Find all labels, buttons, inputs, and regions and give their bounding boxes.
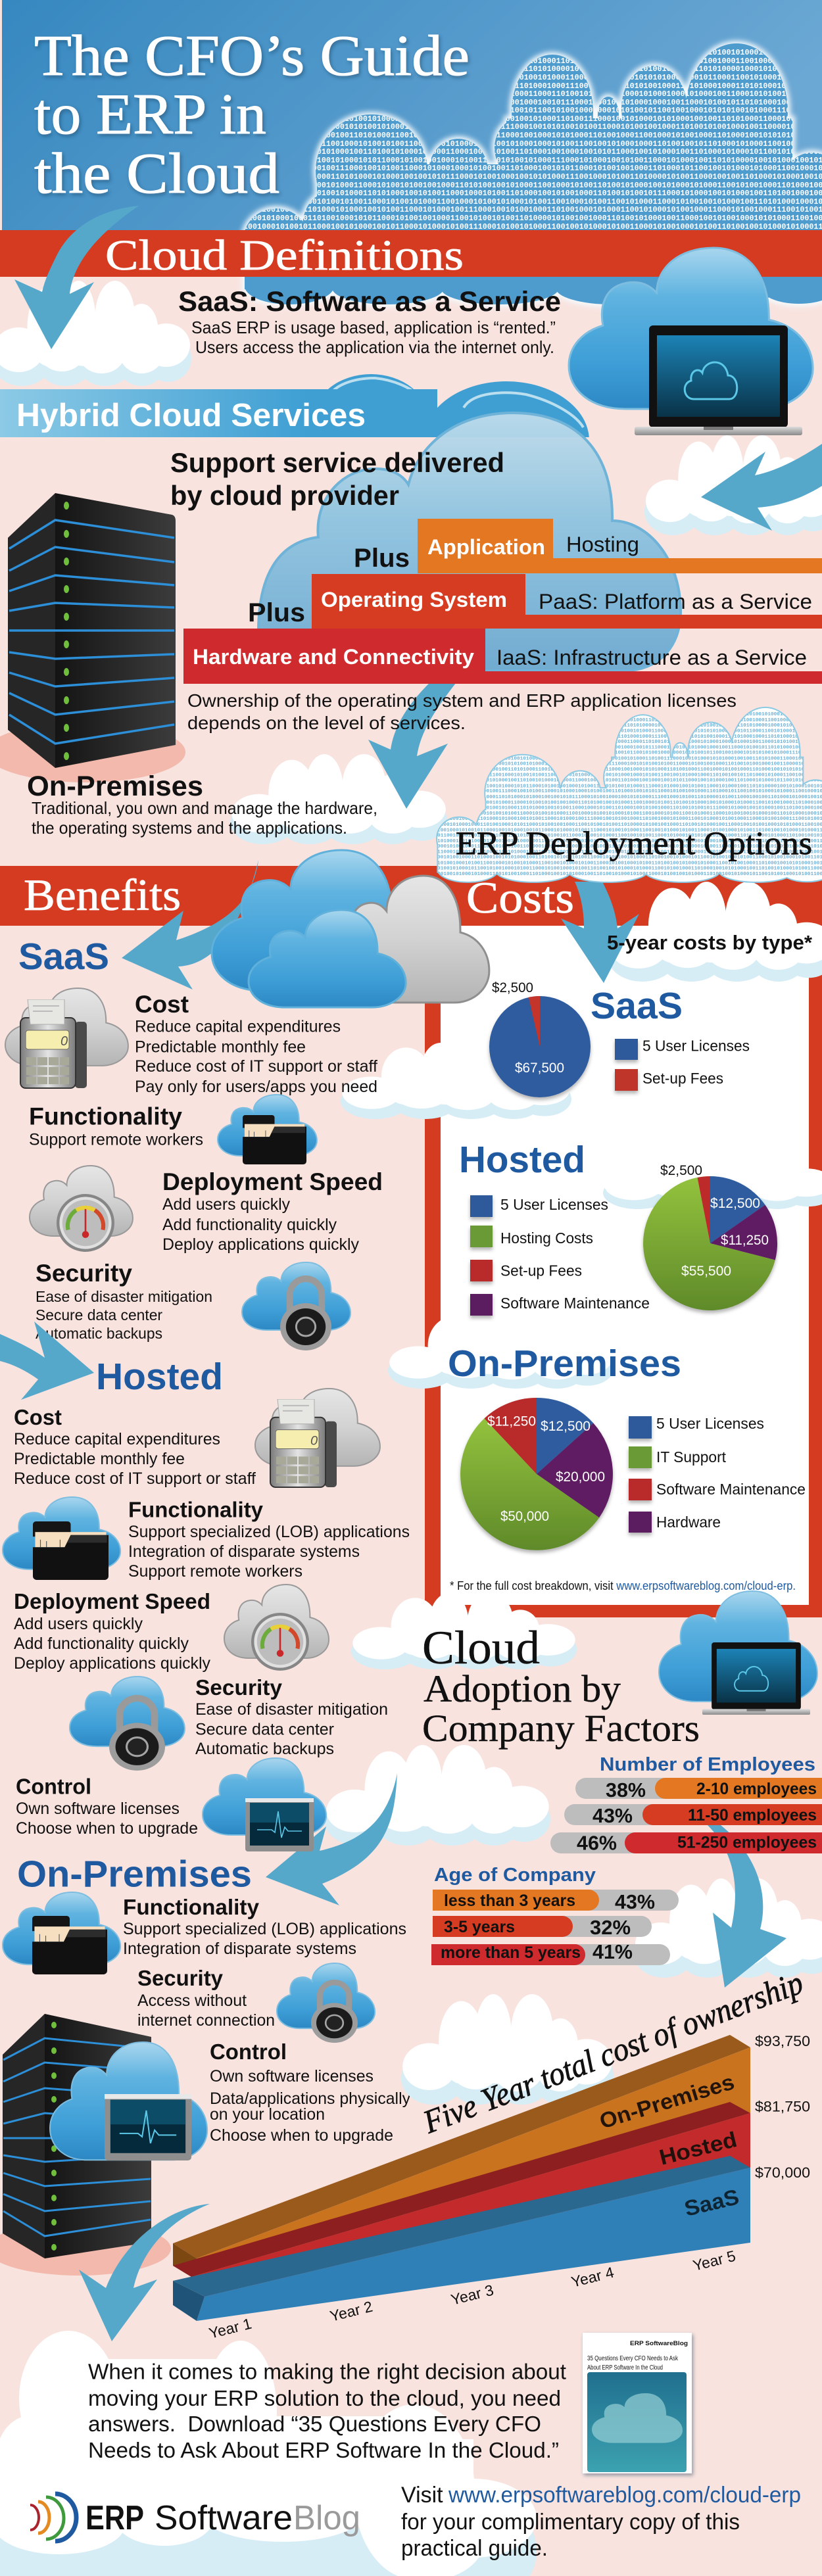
icon: server stack: [8, 493, 176, 768]
heading: Costs: Costs: [466, 872, 574, 922]
text: cost: Pay only for users/apps you need: [135, 1078, 377, 1096]
bar: 11-50 employees: 11-50 employees: [688, 1806, 817, 1825]
icon: gauge in cloud: [30, 1166, 133, 1252]
bar: application: Hosting: [566, 533, 639, 556]
icon: laptop in cloud: [659, 1591, 817, 1715]
icon: lower server stack: [3, 2014, 151, 2258]
white cloud behind chart title: [401, 1994, 614, 2105]
bar: operating system: [248, 574, 822, 629]
bar: 51-250 employees: 51-250 employees: [677, 1834, 817, 1852]
panel: Hosted costs: [459, 1139, 777, 1316]
value labels: $93,750: [755, 2033, 810, 2049]
chart: number of employees: Number of Employees: [600, 1754, 815, 1775]
text: functionality: Functionality: [29, 1103, 182, 1130]
arrow to On-Premises: [266, 1773, 397, 1905]
text: deployment speed: Deployment Speed: [162, 1168, 383, 1195]
legend: 5 User Licenses: [642, 1038, 750, 1055]
heading: Benefits: Benefits: [24, 870, 181, 920]
text: deployment speed: Deploy applications quickly: [14, 1654, 210, 1673]
arrow from right: [701, 444, 822, 531]
call to action text: Needs to Ask About ERP Software In the Cloud.”: [88, 2438, 559, 2462]
bar: 51-250 employees: [550, 1832, 822, 1854]
bar: hardware and connectivity: [183, 629, 822, 684]
text: On-Premises definition: the operating systems and the applications.: [32, 818, 347, 838]
heading: Cloud Definitions: Cloud Definitions: [105, 231, 464, 279]
ownership text: [187, 690, 737, 733]
text: control: on your location: [210, 2105, 325, 2124]
panel: On-Premises costs: $11,250: [487, 1414, 536, 1429]
booklet cover: 35 Questions Every CFO Needs to Ask: [587, 2355, 679, 2362]
pie chart: On-Premises: [460, 1398, 613, 1550]
text: deployment speed: Add functionality quickly: [162, 1216, 337, 1234]
text: security: Automatic backups: [195, 1740, 334, 1758]
arrow to Hosted: [0, 1322, 94, 1400]
white cloud left of on-premises heading: [388, 1312, 614, 1389]
laptop in blue cloud: [569, 248, 813, 435]
text: functionality: [128, 1497, 410, 1581]
bar: 2-10 employees: [575, 1778, 822, 1801]
text: deployment speed: Add functionality quickly: [14, 1634, 189, 1653]
call to action text: When it comes to making the right decision about: [88, 2359, 566, 2384]
text: deployment speed: Deploy applications quickly: [162, 1235, 359, 1254]
text: control: Control: [16, 1774, 91, 1799]
bar: application: Plus: [354, 544, 410, 573]
band: benefits and costs: [0, 866, 822, 926]
panel: On-Premises costs: [448, 1343, 806, 1592]
white cloud bottom of costs panel: [351, 1593, 577, 1669]
legend: 5 User Licenses: [500, 1196, 608, 1213]
text: functionality: [123, 1895, 406, 1958]
bar: 3-5 years: 3-5 years: [444, 1918, 515, 1936]
icon: cash register in cloud: [255, 1389, 380, 1487]
pie chart: Hosted: [643, 1176, 777, 1310]
big pale cloud behind hybrid stack: [258, 413, 681, 671]
legend: Software Maintenance: [656, 1481, 806, 1498]
white cloud behind arrow: [325, 1745, 550, 1846]
call to action text: [88, 2359, 566, 2462]
bar: more than 5 years: more than 5 years: [441, 1944, 581, 1962]
text: SaaS definition: SaaS: Software as a Service: [178, 286, 561, 318]
text: cost: Predictable monthly fee: [14, 1450, 185, 1468]
icon: cash register in cloud: [5, 988, 128, 1088]
text: security: [137, 1966, 275, 2030]
panel: Hosted costs: $55,500: [681, 1264, 731, 1279]
text: SaaS definition: Users access the application via the internet only.: [195, 337, 554, 357]
bar: more than 5 years: 41%: [592, 1940, 633, 1963]
icon: lock in cloud: [277, 1963, 375, 2043]
text: control: Control: [210, 2039, 287, 2064]
ribbon: Hosted: [173, 2102, 750, 2297]
text: On-Premises definition: [27, 771, 377, 838]
panel: On-Premises costs: $20,000: [556, 1469, 605, 1485]
bar: 51-250 employees: 46%: [577, 1832, 617, 1854]
title: [34, 24, 470, 206]
heading: Cloud Adoption by Company Factors: Adoption by: [423, 1667, 621, 1710]
text: security: Secure data center: [195, 1721, 334, 1739]
bar: 3-5 years: [433, 1916, 652, 1939]
bar: 2-10 employees: 38%: [606, 1778, 646, 1801]
visit text: for your complimentary copy of this: [401, 2510, 740, 2535]
legend: 5 User Licenses: [656, 1415, 764, 1432]
logo: ERP SoftwareBlog: ERP: [85, 2499, 144, 2537]
section: Hosted benefits: [3, 1356, 410, 1838]
text: security: Secure data center: [36, 1306, 162, 1324]
text: deployment speed: [162, 1168, 383, 1254]
panel: Hosted costs: $12,500: [710, 1196, 760, 1211]
booklet cover: About ERP Software In the Cloud: [587, 2364, 663, 2372]
heading: Cloud Adoption by Company Factors: Company Factors: [422, 1707, 700, 1750]
bar: operating system: PaaS: Platform as a Service: [539, 590, 812, 613]
bar: operating system: Operating System: [321, 588, 507, 611]
legend: Hosting Costs: [500, 1229, 593, 1247]
text: control: Own software licenses: [210, 2067, 374, 2086]
value labels: $70,000: [755, 2164, 810, 2181]
ribbon: On-Premises: [173, 2035, 750, 2277]
white cloud behind right arrow: [634, 1878, 822, 1978]
white cloud right of costs: [608, 882, 822, 982]
visit text: www.erpsoftwareblog.com/cloud-erp: [448, 2483, 801, 2508]
text: security: Security: [195, 1675, 283, 1700]
icon: monitor in cloud: [50, 2042, 207, 2160]
text: cost: Predictable monthly fee: [135, 1038, 306, 1057]
hybrid cloud services bar: [0, 389, 437, 437]
text: cost: [135, 991, 377, 1096]
logo rings: [30, 2494, 76, 2541]
title: The CFO’s Guide: [34, 24, 470, 88]
text: functionality: Functionality: [128, 1497, 264, 1521]
logo: ERP SoftwareBlog: Blog: [293, 2499, 360, 2537]
logo: ERP SoftwareBlog: [30, 2494, 360, 2541]
text: security: internet connection: [137, 2011, 275, 2030]
panel: On-Premises costs: On-Premises: [448, 1343, 681, 1385]
label: 5-year costs by type: 5-year costs by type*: [607, 931, 813, 954]
visit text: Visit: [401, 2483, 443, 2508]
panel: Hosted costs: $11,250: [721, 1233, 769, 1248]
bar: hardware and connectivity: IaaS: Infrastructure as a Service: [496, 646, 807, 669]
text: functionality: Support specialized (LOB) applications: [123, 1920, 406, 1938]
icon: lock in cloud: [242, 1262, 351, 1350]
text: security: Security: [36, 1260, 132, 1287]
panel: SaaS costs: $67,500: [515, 1061, 564, 1076]
ownership text: Ownership of the operating system and ERP application licenses: [187, 690, 737, 711]
year labels: Year 1: [207, 2315, 253, 2342]
section: SaaS benefits: [5, 936, 383, 1350]
text: deployment speed: Add users quickly: [14, 1615, 143, 1633]
ERP deployment options cloud: [437, 708, 822, 882]
text: security: Security: [137, 1966, 224, 1990]
white cloud over frame: [341, 1043, 571, 1119]
footnote: * For the full cost breakdown, visit www.erpsoftwareblog.com/cloud-erp.: [450, 1579, 796, 1592]
heading: Hybrid Cloud Services: Hybrid Cloud Services: [16, 398, 366, 433]
heading band: Cloud Definitions: [0, 230, 822, 277]
shadow under server stack: [0, 722, 185, 782]
legend: Software Maintenance: [500, 1295, 650, 1312]
panel: SaaS costs: $2,500: [492, 980, 533, 995]
text: cost: Reduce cost of IT support or staff: [14, 1469, 256, 1488]
text: deployment speed: Deployment Speed: [14, 1589, 210, 1613]
bar: less than 3 years: 43%: [615, 1890, 655, 1913]
legend: Hardware: [656, 1514, 721, 1531]
pie chart: SaaS: [489, 996, 591, 1097]
text: control: Own software licenses: [16, 1800, 180, 1818]
title: the Cloud: [34, 142, 279, 206]
arrow down from title: [14, 206, 139, 349]
bar: application: Application: [427, 535, 545, 559]
arrow down to costs: [561, 882, 639, 983]
text: control: Choose when to upgrade: [16, 1819, 198, 1838]
ribbon: SaaS: SaaS: [682, 2184, 741, 2221]
ownership text: depends on the level of services.: [187, 713, 466, 733]
icon: folder in cloud: [218, 1095, 317, 1164]
year labels: Year 4: [569, 2264, 616, 2291]
bar: less than 3 years: [433, 1890, 679, 1913]
costs panel frame: [425, 926, 822, 1617]
text: cost: Reduce cost of IT support or staff: [135, 1057, 377, 1076]
call to action text: answers. Download “35 Questions Every CFO: [88, 2412, 541, 2436]
white cloud under arrow: [230, 754, 447, 844]
text: control: [16, 1774, 198, 1838]
arrow down to on-premises: [368, 677, 460, 809]
text: security: [36, 1260, 212, 1342]
icon: gauge in cloud: [224, 1585, 329, 1671]
white cloud upper right: [644, 435, 822, 535]
text: cost: Cost: [14, 1405, 62, 1429]
binary cloud illustration: [243, 43, 822, 304]
ribbon: SaaS: [173, 2156, 750, 2321]
year labels: Year 5: [691, 2247, 737, 2274]
white cloud left: [0, 281, 191, 386]
white cloud behind hosted pie: [603, 1141, 822, 1209]
section: Hosted benefits: Hosted: [96, 1356, 223, 1398]
legend: [629, 1415, 806, 1533]
value labels: $81,750: [755, 2099, 810, 2115]
icon: folder in cloud: [3, 1892, 120, 1974]
footer cloud: [0, 2331, 537, 2576]
header sky background: [2, 0, 822, 231]
text: functionality: Functionality: [123, 1895, 260, 1919]
arrow down to footer: [79, 2204, 210, 2341]
heading: ERP Deployment Options: ERP Deployment Options: [456, 824, 812, 861]
title: to ERP in: [34, 83, 266, 147]
panel: Hosted costs: Hosted: [459, 1139, 585, 1181]
legend: Set-up Fees: [642, 1070, 723, 1087]
value labels: [755, 2033, 810, 2181]
text: functionality: Integration of disparate systems: [123, 1940, 356, 1958]
cloud cluster: [212, 850, 489, 1007]
legend: IT Support: [656, 1448, 727, 1466]
chart: five year total cost of ownership: [173, 1964, 810, 2342]
text: control: [210, 2039, 410, 2145]
text: functionality: Support remote workers: [29, 1131, 203, 1149]
bar: 11-50 employees: 43%: [592, 1804, 633, 1827]
icon: folder in cloud: [3, 1497, 120, 1580]
legend: Set-up Fees: [500, 1262, 582, 1279]
arrow to SaaS benefits: [122, 860, 258, 990]
panel: Hosted costs: $2,500: [660, 1163, 702, 1178]
text: security: Ease of disaster mitigation: [36, 1288, 212, 1305]
year labels: [207, 2247, 737, 2342]
text: security: [195, 1675, 388, 1758]
cloud lobes above hybrid bar: [328, 374, 589, 437]
bar: 2-10 employees: 2-10 employees: [696, 1780, 817, 1798]
chart: number of employees: [550, 1754, 822, 1854]
panel: SaaS costs: [489, 980, 750, 1097]
text: cost: Reduce capital expenditures: [14, 1430, 220, 1448]
text: security: Ease of disaster mitigation: [195, 1700, 388, 1719]
text: security: Automatic backups: [36, 1325, 162, 1342]
support text: [170, 447, 504, 511]
booklet cover: ERP SoftwareBlog: [630, 2340, 688, 2347]
text: On-Premises definition: Traditional, you own and manage the hardware,: [32, 798, 377, 818]
icon: lock in cloud: [70, 1677, 185, 1771]
bar: application: [354, 519, 822, 573]
text: On-Premises definition: On-Premises: [27, 771, 203, 802]
bar: hardware and connectivity: Hardware and Connectivity: [193, 645, 474, 669]
call to action text: moving your ERP solution to the cloud, you need: [88, 2386, 561, 2410]
text: functionality: [29, 1103, 203, 1149]
text: functionality: Support specialized (LOB) applications: [128, 1523, 410, 1541]
icon: monitor in cloud: [203, 1758, 326, 1851]
section: SaaS benefits: SaaS: [18, 936, 109, 978]
year labels: Year 3: [449, 2281, 495, 2308]
text: SaaS definition: [178, 286, 561, 357]
booklet cover: [583, 2333, 692, 2473]
text: deployment speed: [14, 1589, 210, 1673]
bar: 11-50 employees: [564, 1804, 822, 1827]
text: deployment speed: Add users quickly: [162, 1195, 290, 1214]
heading: Cloud Adoption by Company Factors: [422, 1621, 700, 1750]
heading: Cloud Adoption by Company Factors: Cloud: [422, 1621, 540, 1674]
legend: [470, 1195, 650, 1316]
text: cost: [14, 1405, 256, 1488]
text: functionality: Support remote workers: [128, 1562, 302, 1581]
text: SaaS definition: SaaS ERP is usage based, application is “rented.”: [191, 318, 556, 337]
stacked service bars: [183, 519, 822, 684]
visit text: practical guide.: [401, 2536, 548, 2561]
bar: less than 3 years: less than 3 years: [444, 1892, 575, 1910]
text: cost: Cost: [135, 991, 189, 1018]
bar: more than 5 years: [431, 1940, 670, 1965]
year labels: Year 2: [328, 2298, 374, 2325]
section: On-Premises benefits: [3, 1853, 406, 2043]
arrow down to chart: [708, 1825, 786, 1988]
ribbon: On-Premises: On-Premises: [596, 2069, 737, 2134]
bar: 3-5 years: 32%: [590, 1916, 631, 1939]
support text: Support service delivered: [170, 447, 504, 478]
logo: ERP SoftwareBlog: Software: [155, 2499, 293, 2537]
visit text: [401, 2483, 801, 2561]
text: control: Data/applications physically: [210, 2089, 410, 2108]
panel: On-Premises costs: $12,500: [541, 1419, 591, 1434]
shadow under lower server: [0, 2222, 171, 2276]
section: On-Premises benefits: On-Premises: [17, 1853, 252, 1895]
text: security: Access without: [137, 1992, 247, 2010]
text: control: Choose when to upgrade: [210, 2126, 393, 2145]
panel: SaaS costs: SaaS: [591, 985, 683, 1027]
panel: On-Premises costs: $50,000: [500, 1509, 549, 1524]
costs panel interior: [441, 926, 809, 1605]
legend: [615, 1038, 750, 1091]
chart: age of company: Age of Company: [434, 1865, 596, 1886]
text: functionality: Integration of disparate systems: [128, 1542, 360, 1561]
chart: age of company: [431, 1865, 679, 1965]
bar: operating system: Plus: [248, 598, 305, 627]
ribbon: Hosted: Hosted: [657, 2127, 739, 2170]
support text: by cloud provider: [170, 480, 399, 511]
text: cost: Reduce capital expenditures: [135, 1018, 341, 1036]
